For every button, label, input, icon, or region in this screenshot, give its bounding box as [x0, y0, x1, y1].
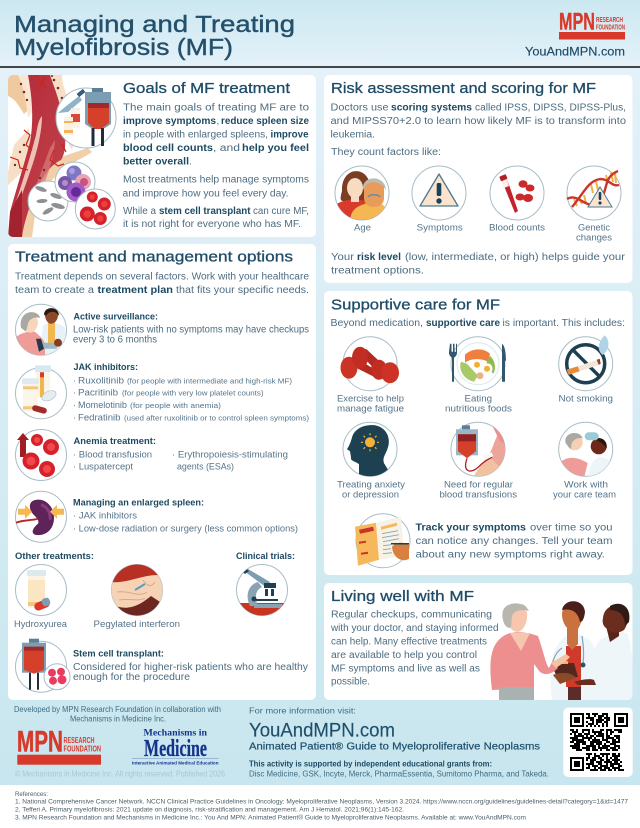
text: goals body: it is not right for everyone who has MF.	[123, 219, 301, 230]
text: anemia treatment: · Blood transfusion	[73, 449, 152, 459]
text: goals body: reduce spleen size	[221, 116, 309, 127]
labels: supportive row 1: Not smoking	[558, 394, 613, 404]
panel: risk assessment	[324, 75, 632, 283]
title: Managing and Treating	[14, 11, 295, 37]
logo: Mechanisms in Medicine: Mechanisms in	[144, 729, 208, 739]
text: living well body	[330, 610, 498, 688]
text: supportive intro: Beyond medication,	[330, 318, 423, 329]
illustration: bone marrow with treatment circles	[8, 75, 116, 237]
text: goals body: in people with enlarged spleens,	[123, 130, 268, 140]
text: anemia treatment	[73, 436, 288, 472]
icon: active surveillance	[15, 304, 68, 360]
text: risk intro	[330, 103, 626, 158]
text: stem cell transplant	[73, 648, 308, 683]
text: treatment intro: Treatment depends on several factors. Work with your healthcare	[15, 272, 309, 282]
text: living well body: Regular checkups, communicating	[331, 610, 492, 621]
heading: risk: Risk assessment and scoring for MF	[331, 80, 596, 97]
text: goals body	[122, 103, 310, 230]
text: enlarged spleen: · Low-dose radiation or surgery (less common options)	[73, 523, 298, 533]
text: JAK inhibitors: ·	[73, 412, 76, 422]
labels: supportive row 1: nutritious foods	[445, 404, 513, 414]
footer: more information: For more information visit:	[249, 705, 356, 715]
icon: nutritious food	[449, 337, 506, 391]
footer: more information	[249, 705, 549, 778]
icon: symptoms	[412, 166, 466, 220]
icon: blood transfusion	[451, 422, 508, 479]
logo: MPN Research Foundation footer: RESEARCH	[64, 736, 95, 745]
text: JAK inhibitors: (for people with intermediate and high-risk MF)	[127, 376, 292, 385]
footer: credits: Developed by MPN Research Foundation in collaboration with	[14, 705, 221, 714]
heading: other treatments: Other treatments:	[15, 551, 94, 561]
text: JAK inhibitors: Ruxolitinib	[78, 375, 124, 385]
icon: age	[335, 166, 389, 223]
references: 2. Tefferi A. Primary myelofibrosis: 2021 update on diagnosis, risk-stratification and management. Am J Hematol. 2021;96(1):145-162.	[15, 806, 404, 814]
text: JAK inhibitors: Fedratinib	[78, 412, 121, 422]
title	[14, 11, 295, 60]
text: track your symptoms	[416, 523, 612, 561]
logo: MPN Research Foundation footer: FOUNDATION	[64, 745, 101, 754]
text: track your symptoms: about any new symptoms right away.	[416, 550, 605, 561]
footer: credits: Mechanisms in Medicine Inc.	[70, 714, 166, 723]
title: Myelofibrosis (MF)	[14, 34, 233, 60]
references: 3. MPN Research Foundation and Mechanisms in Medicine Inc.: You And MPN: Animated Patient® Guide to Myeloproliferative Neoplasms. Available at: www.YouAndMPN.com	[15, 813, 526, 821]
text: risk level: treatment options.	[331, 266, 424, 276]
heading: clinical trials: Clinical trials:	[236, 551, 295, 561]
text: supportive intro: is important. This includes:	[502, 318, 625, 329]
text: active surveillance: every 3 to 6 months	[73, 335, 157, 346]
text: stem cell transplant: Considered for higher-risk patients who are healthy	[73, 662, 308, 673]
text: JAK inhibitors: (used after ruxolitinib or to control spleen symptoms)	[124, 413, 309, 422]
text: goals body: Most treatments help manage symptoms	[123, 175, 309, 186]
labels: supportive row 1	[337, 394, 613, 414]
label: pegylated interferon: Pegylated interferon	[94, 619, 180, 629]
footer: more information: This activity is supported by independent educational grants from:	[249, 760, 492, 769]
text: risk intro: They count factors like:	[331, 147, 441, 158]
QR code	[563, 708, 633, 777]
text: JAK inhibitors	[73, 362, 309, 422]
labels: supportive row 2: Treating anxiety	[337, 479, 406, 489]
label: hydroxyurea: Hydroxyurea	[14, 619, 67, 629]
text: enlarged spleen	[73, 498, 298, 533]
footer: more information: Animated Patient® Guide to Myeloproliferative Neoplasms	[249, 740, 540, 752]
labels: supportive row 2: blood transfusions	[440, 489, 518, 499]
text: risk level	[331, 252, 626, 276]
icon: enlarged spleen	[16, 491, 66, 542]
icon: JAK inhibitors pills	[16, 365, 66, 419]
text: risk intro: Doctors use	[330, 103, 389, 114]
footer: credits	[14, 705, 221, 723]
text: goals body: .	[189, 157, 192, 168]
website link: YouAndMPN.com	[525, 44, 625, 58]
text: anemia treatment: agents (ESAs)	[177, 462, 234, 472]
icon: symptom journal	[355, 514, 410, 568]
text: active surveillance	[73, 311, 309, 346]
labels: supportive row 2: Need for regular	[444, 479, 513, 489]
text: JAK inhibitors: ·	[73, 400, 76, 410]
text: JAK inhibitors: Momelotinib	[78, 400, 127, 410]
labels: supportive row 1: Eating	[464, 394, 492, 404]
panel: living well	[324, 583, 633, 700]
panel: supportive care	[324, 291, 632, 575]
references	[15, 791, 629, 821]
text: goals body: and improve how you feel every day.	[122, 189, 288, 200]
text: living well body: MF symptoms and live as well as	[331, 663, 480, 674]
logo: MPN Research Foundation footer: MPN	[17, 726, 63, 759]
text: anemia treatment: · Luspatercept	[73, 462, 134, 472]
text: goals body: While a	[123, 206, 156, 217]
labels: supportive row 2: your care team	[553, 489, 616, 499]
text: risk level: risk level	[357, 252, 401, 263]
text: risk level: (low, intermediate, or high) helps guide your	[405, 252, 626, 263]
logo: Mechanisms in Medicine	[132, 729, 219, 766]
patient	[490, 632, 558, 690]
panel: treatment and management options	[8, 244, 316, 700]
labels: risk factors: Genetic	[578, 223, 611, 233]
text: track your symptoms: Track your symptoms	[416, 523, 526, 534]
text: treatment intro	[15, 272, 309, 296]
text: treatment intro: that fits your specific needs.	[176, 285, 309, 296]
doctor middle	[550, 634, 594, 700]
text: stem cell transplant: Stem cell transplant:	[73, 648, 164, 658]
labels: supportive row 2: Work with	[564, 479, 608, 489]
text: living well body: with your doctor, and staying informed	[330, 623, 498, 634]
icon: care team	[559, 422, 616, 479]
text: living well body: possible.	[331, 676, 370, 688]
text: enlarged spleen: · JAK inhibitors	[73, 511, 138, 521]
labels: supportive row 1: manage fatigue	[337, 404, 404, 414]
icon: anemia red cells	[16, 430, 66, 480]
logo: MPN Research Foundation: RESEARCH	[596, 17, 623, 24]
text: goals body: blood cell counts	[123, 143, 213, 154]
circle: red blood cells	[75, 189, 115, 229]
text: treatment intro: team to create a	[15, 285, 94, 296]
text: track your symptoms: can notice any changes. Tell your team	[416, 536, 612, 547]
labels: supportive row 2: or depression	[342, 489, 399, 499]
left bone	[8, 128, 32, 185]
labels: risk factors	[354, 223, 613, 243]
icon: stem cell transplant	[16, 639, 70, 692]
text: active surveillance: Low-risk patients with no symptoms may have checkups	[73, 325, 309, 336]
icon: blood counts	[490, 166, 544, 220]
references: References:	[15, 791, 48, 798]
labels: risk factors: Symptoms	[417, 223, 463, 233]
text: supportive intro	[330, 318, 625, 329]
text: track your symptoms: over time so you	[530, 523, 612, 534]
text: goals body: ,	[216, 116, 219, 127]
labels: risk factors: Age	[354, 223, 371, 233]
text: goals body: The main goals of treating MF are to	[123, 103, 310, 114]
text: active surveillance: Active surveillance:	[74, 311, 158, 321]
text: living well body: are available to help you control	[331, 650, 477, 661]
doctor right	[595, 632, 632, 700]
circle: white blood cells	[55, 162, 95, 202]
text: stem cell transplant: enough for the procedure	[73, 672, 190, 683]
text: treatment intro: treatment plan	[98, 285, 173, 296]
references: 1. National Comprehensive Cancer Network. NCCN Clinical Practice Guidelines in Oncology: Myeloproliferative Neoplasms, Version 3.2024. https://www.nccn.org/guidelines/guidelines-detail?category=1&id=1477	[15, 799, 629, 806]
heading: goals: Goals of MF treatment	[123, 80, 291, 97]
text: JAK inhibitors: ·	[73, 375, 76, 385]
circle: platelets	[28, 181, 68, 221]
labels: risk factors: Blood counts	[489, 223, 546, 233]
labels: supportive row 1: Exercise to help	[337, 394, 404, 404]
icon: hydroxyurea	[16, 564, 66, 616]
text: living well body: can help. Many effective treatments	[331, 636, 487, 648]
icon: pegylated interferon	[111, 564, 163, 616]
icon: genetic changes	[567, 166, 621, 220]
icon: dumbbell	[340, 337, 399, 391]
panel: goals of MF treatment	[8, 75, 316, 237]
text: goals body: improve	[270, 130, 309, 140]
text: anemia treatment: Anemia treatment:	[74, 436, 156, 446]
logo: Mechanisms in Medicine: Medicine	[144, 736, 207, 762]
text: supportive intro: supportive care	[426, 318, 500, 329]
text: goals body: stem cell transplant	[159, 206, 251, 217]
text: goals body: can cure MF,	[253, 206, 309, 217]
heading: treatment: Treatment and management options	[15, 249, 293, 266]
labels: supportive row 2	[337, 479, 616, 499]
text: JAK inhibitors: Pacritinib	[78, 388, 118, 398]
upper right dotted bone	[50, 75, 74, 150]
text: enlarged spleen: Managing an enlarged spleen:	[73, 498, 204, 508]
text: goals body: , and	[213, 143, 240, 154]
text: risk intro: scoring systems	[391, 103, 472, 114]
text: goals body: help you feel	[242, 143, 309, 154]
copyright: © Mechanisms in Medicine Inc. All rights reserved. Published 2026.	[15, 770, 227, 779]
circle: bag and bottles	[56, 88, 116, 148]
text: risk intro: leukemia.	[330, 130, 375, 140]
heading: supportive care: Supportive care for MF	[331, 296, 500, 313]
lower bone	[20, 148, 92, 237]
heading: living well: Living well with MF	[331, 588, 474, 605]
logo: MPN Research Foundation footer	[17, 726, 101, 765]
text: risk intro: called IPSS, DIPSS, DIPSS-Plus,	[475, 103, 626, 114]
labels: risk factors: changes	[576, 233, 613, 243]
icon: microscope	[236, 564, 288, 617]
icon: anxiety head	[343, 422, 397, 477]
icon: not smoking	[559, 337, 613, 391]
logo: Mechanisms in Medicine: Interactive Animated Medical Education	[132, 760, 219, 766]
text: JAK inhibitors: (for people with very low platelet counts)	[122, 389, 264, 398]
text: JAK inhibitors: JAK inhibitors:	[74, 362, 138, 372]
illustration: patient with doctors	[490, 601, 633, 700]
footer: more information: Disc Medicine, GSK, Incyte, Merck, PharmaEssentia, Sumitomo Pharma, and Takeda.	[249, 769, 549, 778]
text: JAK inhibitors: ·	[73, 388, 76, 398]
text: risk intro: and MIPSS70+2.0 to learn how likely MF is to transform into	[330, 116, 626, 127]
text: anemia treatment: · Erythropoiesis-stimulating	[172, 449, 288, 459]
text: goals body: improve symptoms	[123, 116, 216, 127]
marrow	[10, 75, 65, 237]
text: goals body: better overall	[123, 157, 189, 168]
text: JAK inhibitors: (for people with anemia)	[130, 401, 221, 410]
footer: more information: YouAndMPN.com	[249, 720, 395, 742]
upper left tan band	[8, 75, 28, 114]
logo: MPN Research Foundation: MPN	[559, 8, 595, 36]
text: risk level: Your	[331, 252, 355, 263]
